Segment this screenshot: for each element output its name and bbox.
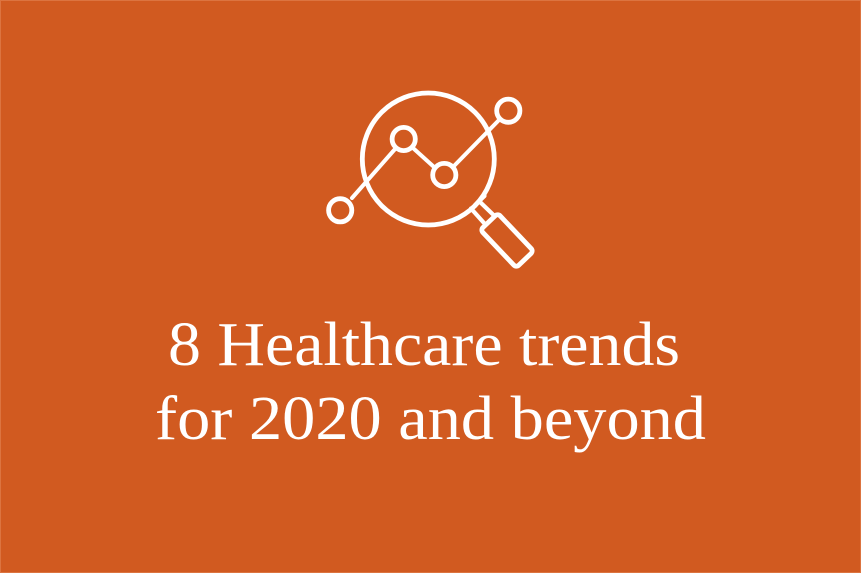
chart point 3: [433, 163, 456, 187]
icon: magnifier lens: [362, 93, 494, 225]
chart point 4: [497, 99, 520, 122]
title line 2: for 2020 and beyond: [155, 385, 706, 453]
chart point 2: [392, 127, 415, 151]
chart point 1: [329, 199, 352, 222]
icon: magnifier neck: [471, 196, 493, 223]
icon: magnifier handle: [480, 213, 534, 268]
icon: magnifying glass over line chart: [329, 93, 534, 268]
line chart segments: [352, 119, 500, 198]
title: [155, 311, 706, 453]
title line 1: 8 Healthcare trends: [168, 311, 680, 379]
